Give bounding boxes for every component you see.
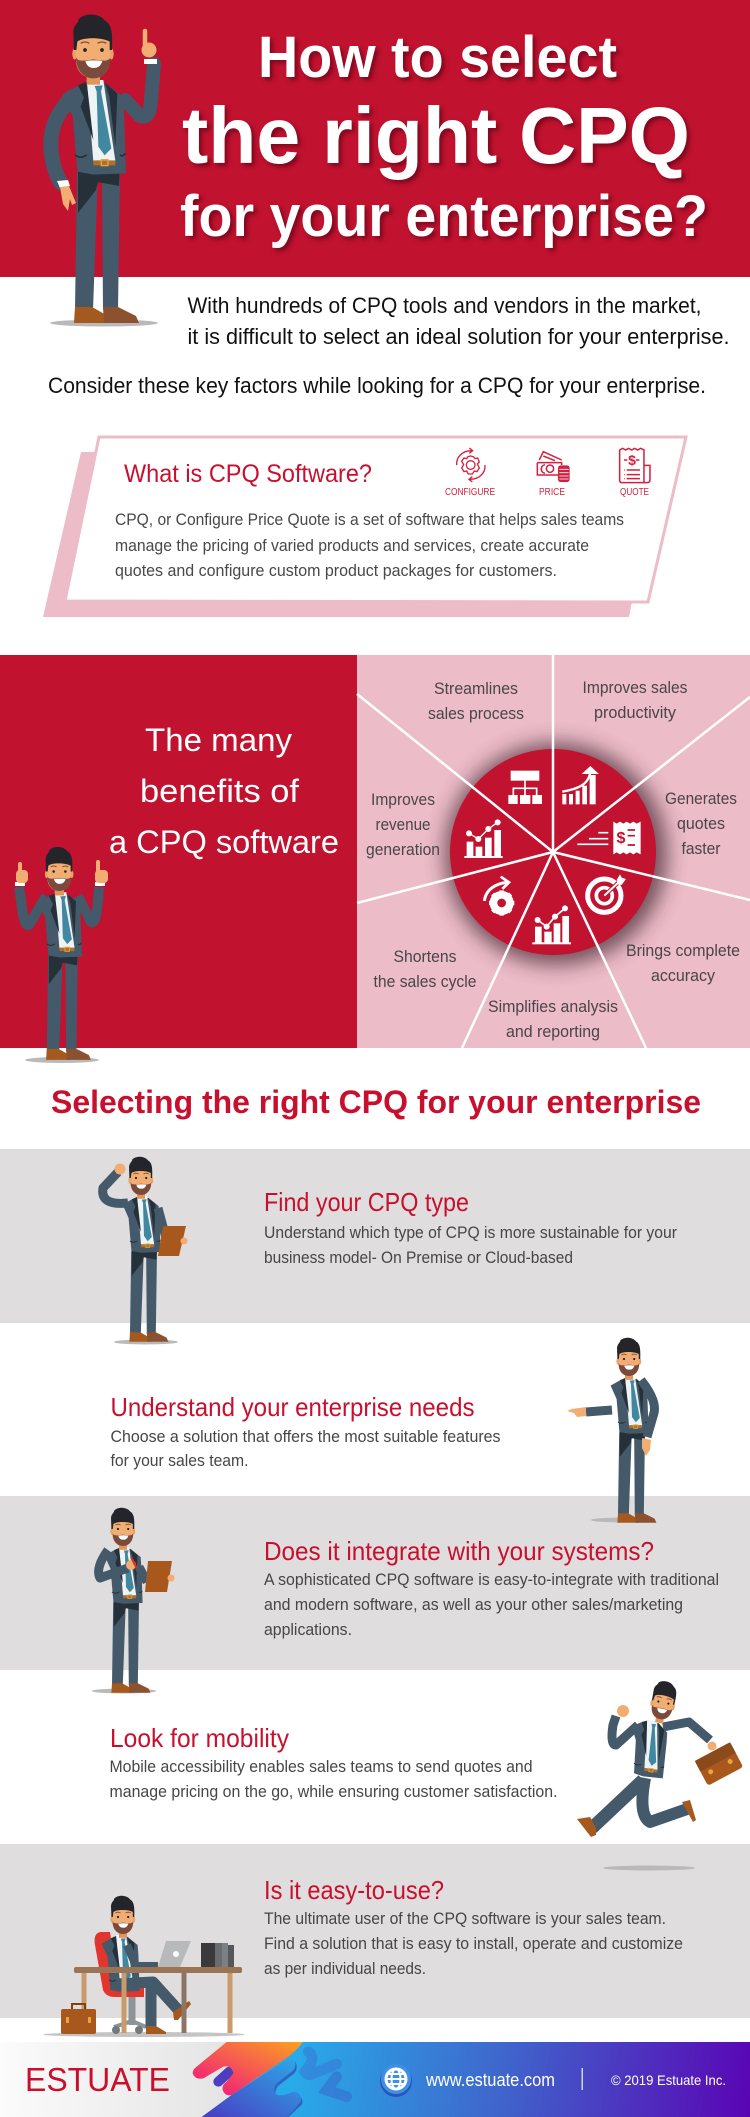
icon: analysis chart — [532, 905, 571, 944]
step: find your CPQ type: business model- On Premise or Cloud-based — [264, 1248, 573, 1267]
benefit: sales cycle — [374, 947, 476, 991]
character: man writing on clipboard — [92, 1508, 174, 1694]
header banner — [0, 0, 750, 277]
character: thumbs up man — [15, 847, 108, 1063]
step: understand enterprise needs: Understand your enterprise needs — [110, 1392, 474, 1422]
benefit: productivity — [582, 678, 688, 722]
character: pointing man right — [567, 1338, 656, 1523]
benefit: analysis: and reporting — [506, 1022, 600, 1041]
band: find your CPQ type — [0, 1149, 750, 1323]
benefit: sales cycle: Shortens — [394, 947, 456, 966]
footer graphic: swoosh — [193, 2042, 347, 2117]
icon label: quote: QUOTE — [620, 487, 649, 498]
step: find your CPQ type: Understand which type of CPQ is more sustainable for your — [264, 1223, 677, 1242]
benefit: productivity: productivity — [594, 703, 676, 722]
intro text: Consider these key factors while looking for a CPQ for your enterprise. — [48, 373, 706, 398]
benefit: accuracy: accuracy — [651, 966, 715, 985]
benefit: streamlines: Streamlines — [434, 679, 518, 698]
band: easy to use — [0, 1844, 750, 2018]
step: look for mobility: Look for mobility — [110, 1723, 289, 1753]
benefits title: benefits of — [140, 773, 299, 809]
benefit: sales cycle: the sales cycle — [374, 972, 476, 991]
benefit: analysis: Simplifies analysis — [488, 997, 618, 1016]
icon: growth arrow — [562, 766, 599, 804]
icon: quote — [620, 448, 650, 483]
icon: target — [588, 874, 626, 912]
intro text: With hundreds of CPQ tools and vendors in the market, — [188, 293, 702, 318]
body text: CPQ definition: manage the pricing of varied products and services, create accurate — [115, 537, 589, 555]
logo: ESTUATE: ESTUATE — [25, 2061, 170, 2098]
icon: revenue chart — [464, 819, 503, 858]
step: integrate with your systems: Does it integrate with your systems? — [264, 1536, 654, 1566]
benefit: revenue: revenue — [376, 815, 430, 834]
step: understand enterprise needs: Choose a solution that offers the most suitable features — [110, 1427, 500, 1446]
heading: what is CPQ: What is CPQ Software? — [124, 460, 372, 488]
benefit: streamlines: sales process — [428, 704, 524, 723]
character: running man with briefcase — [577, 1679, 743, 1870]
benefit: productivity: Improves sales — [582, 678, 688, 697]
benefit: quotes faster: Generates — [665, 789, 737, 808]
step: look for mobility: Mobile accessibility enables sales teams to send quotes and — [110, 1757, 532, 1776]
benefit: quotes faster — [665, 789, 737, 858]
benefit: revenue — [366, 790, 440, 859]
icon: gear arrow — [484, 877, 514, 916]
website: www.estuate.com — [425, 2070, 555, 2090]
intro text — [48, 293, 730, 398]
step: integrate with your systems: and modern software, as well as your other sales/marketing — [264, 1595, 683, 1614]
icon label: price: PRICE — [539, 487, 565, 498]
section heading: Selecting the right CPQ for your enterprise — [51, 1084, 701, 1120]
intro text: it is difficult to select an ideal solution for your enterprise. — [188, 324, 730, 349]
character: thinking man with clipboard — [103, 1157, 188, 1344]
step: find your CPQ type: Find your CPQ type — [264, 1187, 469, 1217]
benefits title: The many — [145, 722, 292, 758]
title: How to select — [258, 25, 617, 90]
body text: CPQ definition: CPQ, or Configure Price Quote is a set of software that helps sales teams — [115, 511, 624, 529]
title: the right CPQ — [182, 91, 690, 180]
footer — [0, 2042, 750, 2117]
benefits title: a CPQ software — [109, 824, 339, 860]
dollar sign in quote icon: $ — [628, 452, 636, 468]
icon: price — [537, 452, 570, 482]
benefit: analysis — [488, 997, 618, 1041]
icon: globe — [380, 2064, 412, 2097]
step: integrate with your systems — [264, 1536, 719, 1639]
benefit: accuracy: Brings complete — [626, 941, 740, 960]
benefit: accuracy — [626, 941, 740, 985]
benefit: quotes faster: faster — [682, 839, 721, 858]
benefit: streamlines — [428, 679, 524, 723]
panel: what is CPQ software — [43, 437, 686, 617]
benefit: revenue: generation — [366, 840, 440, 859]
icon: quotes faster — [577, 822, 641, 854]
body text: CPQ definition — [115, 511, 624, 580]
dollar sign in receipt icon: $ — [617, 830, 626, 847]
step: integrate with your systems: A sophisticated CPQ software is easy-to-integrate with traditional — [264, 1570, 719, 1589]
step: look for mobility — [110, 1723, 558, 1801]
step: understand enterprise needs: for your sales team. — [110, 1451, 248, 1470]
icon label: configure: CONFIGURE — [445, 487, 495, 498]
icon: configure — [457, 448, 485, 482]
step: easy to use — [264, 1875, 683, 1978]
step: easy to use: Is it easy-to-use? — [264, 1875, 444, 1905]
benefit: quotes faster: quotes — [677, 814, 725, 833]
icon: org chart — [508, 771, 542, 804]
step: understand enterprise needs — [110, 1392, 500, 1470]
step: find your CPQ type — [264, 1187, 677, 1267]
step: easy to use: Find a solution that is easy to install, operate and customize — [264, 1934, 683, 1953]
step: easy to use: as per individual needs. — [264, 1959, 426, 1978]
band: integrate — [0, 1496, 750, 1670]
character: man at desk — [43, 1896, 245, 2037]
body text: CPQ definition: quotes and configure custom product packages for customers. — [115, 562, 557, 580]
step: integrate with your systems: applications. — [264, 1620, 352, 1639]
title: for your enterprise? — [180, 184, 708, 249]
character: pointing man — [50, 14, 158, 327]
step: easy to use: The ultimate user of the CPQ software is your sales team. — [264, 1909, 666, 1928]
step: look for mobility: manage pricing on the go, while ensuring customer satisfaction. — [110, 1782, 558, 1801]
benefit: revenue: Improves — [371, 790, 435, 809]
panel: benefits wheel — [357, 655, 750, 1048]
title — [180, 25, 708, 249]
benefits title — [109, 722, 339, 860]
panel: benefits left — [0, 655, 357, 1048]
copyright: © 2019 Estuate Inc. — [611, 2072, 726, 2088]
